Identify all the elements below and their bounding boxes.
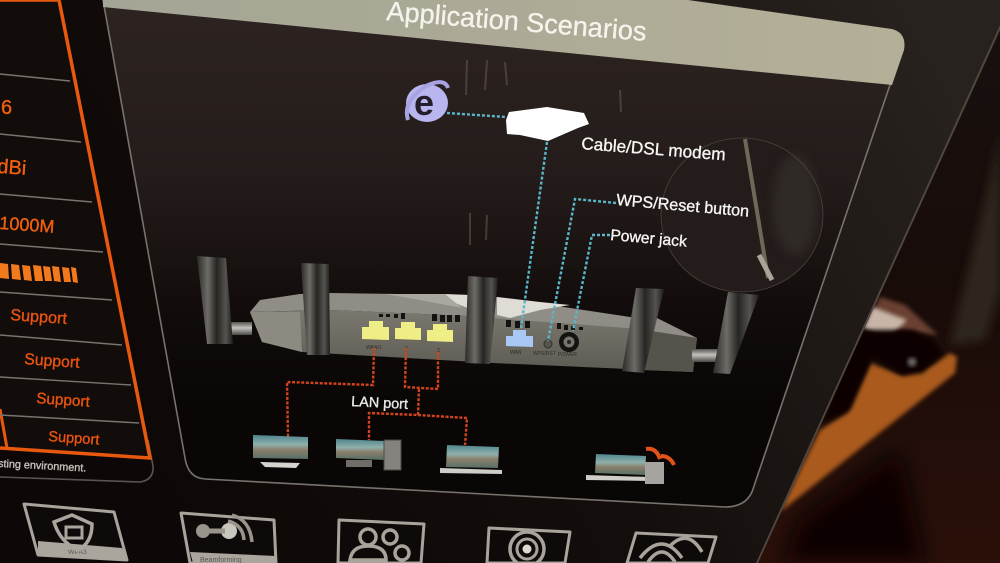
- feature badges: [24, 504, 716, 563]
- support labels: [10, 306, 100, 449]
- badge: wifi signal: [627, 533, 716, 563]
- row values: [0, 25, 55, 237]
- connection line: internet to modem: [447, 113, 506, 117]
- main panel: [103, 0, 904, 507]
- LAN and WAN ports: [362, 321, 389, 340]
- icon: internet globe: e: [414, 82, 434, 123]
- icon: internet globe: [406, 82, 448, 123]
- row values: 6: [1, 97, 12, 119]
- antennas: [197, 256, 233, 344]
- badge: multiple users: [338, 520, 424, 563]
- orange table border: [0, 0, 150, 458]
- label: Power jack: Power jack: [610, 227, 688, 251]
- support labels: Support: [10, 306, 68, 328]
- port captions: 2: [405, 346, 408, 352]
- support labels: Support: [24, 351, 81, 372]
- port captions: [366, 345, 577, 358]
- worn scratch patch: [661, 138, 823, 292]
- port captions: WAN: [510, 350, 522, 356]
- badge: Beamforming: [181, 513, 276, 563]
- left specifications panel: [0, 0, 153, 482]
- black clip: [823, 330, 943, 423]
- header band: [103, 0, 904, 85]
- port captions: WPS/RST: [533, 351, 556, 357]
- port captions: 3: [437, 348, 440, 354]
- antenna hinges: [226, 322, 252, 335]
- status LEDs: [379, 313, 583, 330]
- label: LAN port: LAN port: [351, 394, 408, 413]
- port captions: POWER: [558, 352, 577, 358]
- port captions: WAN/1: [366, 345, 382, 351]
- router top shell: [250, 293, 697, 350]
- footnote: sting environment.: [0, 458, 87, 475]
- device: wireless laptop and phone: [586, 449, 674, 484]
- orange object: [780, 353, 957, 512]
- support labels: Support: [36, 390, 91, 411]
- connection line: WPS button: [548, 199, 616, 341]
- row values: 1000M: [0, 213, 55, 237]
- box edge highlight: [756, 25, 1000, 563]
- shadow under orange object: [783, 450, 925, 563]
- reset button: [544, 340, 552, 348]
- badge: WPA3: [24, 504, 127, 560]
- table row lines: [0, 74, 139, 423]
- device: desktop monitor: [253, 435, 308, 468]
- label: Cable/DSL modem: Cable/DSL modem: [581, 133, 726, 164]
- router body: [250, 310, 697, 372]
- print wear streaks: [466, 60, 621, 245]
- devices: [253, 435, 674, 484]
- badge: WPA3: WPA3: [68, 549, 87, 556]
- power jack: [559, 332, 579, 352]
- icon: modem: [506, 107, 589, 141]
- label: WPS/Reset button: WPS/Reset button: [616, 191, 750, 221]
- LAN cabling: [287, 348, 467, 445]
- device: laptop: [440, 445, 502, 474]
- router: [197, 256, 759, 374]
- badge: coverage rings: [487, 528, 570, 563]
- connection line: modem to WAN port: [521, 142, 547, 328]
- signal bar row: [0, 263, 78, 283]
- device: desktop computer with tower: [336, 439, 401, 470]
- connection line: power jack: [573, 235, 610, 331]
- support labels: Support: [48, 429, 100, 449]
